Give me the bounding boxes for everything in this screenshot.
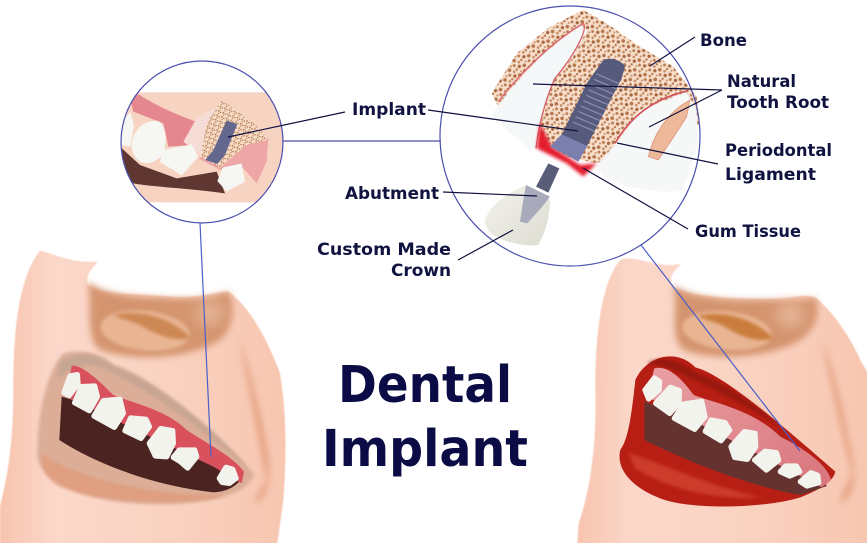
right face: mouth with restored tooth xyxy=(577,258,867,543)
implant threads xyxy=(573,74,618,131)
teeth xyxy=(64,375,236,483)
gum around implant xyxy=(198,138,268,183)
lips xyxy=(37,351,254,504)
inner bone in right tooth xyxy=(648,100,690,160)
nose base shading xyxy=(87,280,233,357)
connector: small circle to left mouth xyxy=(200,223,211,457)
label: periodontal ligament xyxy=(725,141,832,185)
label: periodontal ligament: Periodontal xyxy=(725,141,832,161)
implant xyxy=(205,121,237,164)
label: natural tooth root xyxy=(727,72,829,113)
crown xyxy=(485,185,550,245)
label: gum tissue: Gum Tissue xyxy=(695,222,801,242)
tooth far left xyxy=(122,112,134,146)
leader lines xyxy=(228,37,722,260)
tooth 1 xyxy=(132,121,166,163)
connector: large circle to right mouth xyxy=(641,245,800,451)
abutment xyxy=(520,185,550,223)
translucent root xyxy=(184,106,218,155)
skin xyxy=(577,258,867,543)
large circle: implant detail xyxy=(440,6,700,266)
left face: mouth with missing tooth xyxy=(0,251,286,543)
tooth 2 xyxy=(160,144,198,176)
lips xyxy=(620,356,835,507)
circle contents xyxy=(485,10,700,245)
small circle: implant in jaw xyxy=(120,61,285,223)
implant collar xyxy=(550,134,587,162)
mouth interior xyxy=(644,402,827,495)
implant shaft xyxy=(562,59,625,147)
nostril xyxy=(98,306,192,355)
tooth 3 xyxy=(217,163,245,192)
bone xyxy=(492,10,700,163)
philtrum shading xyxy=(238,337,269,503)
upper gum xyxy=(647,368,831,487)
nose tip highlight xyxy=(197,302,223,325)
title xyxy=(322,356,528,479)
nose tip highlight xyxy=(776,304,804,326)
large circle outline xyxy=(440,6,700,266)
label: abutment: Abutment xyxy=(345,184,439,204)
implant body xyxy=(550,59,625,162)
lower lip highlight xyxy=(629,453,760,498)
cheek shading xyxy=(822,340,854,503)
right root edge xyxy=(615,91,688,143)
gum tissue xyxy=(537,123,597,177)
nostril xyxy=(680,307,774,355)
upper lip tone xyxy=(58,354,250,470)
small circle outline xyxy=(121,61,283,223)
upper lip dark xyxy=(647,359,780,427)
title: Implant xyxy=(322,420,528,479)
label: custom made crown: Custom Made xyxy=(317,240,451,260)
circle contents xyxy=(120,92,285,202)
upper gum xyxy=(132,94,195,147)
mouth interior xyxy=(59,397,243,492)
connector: circle to circle xyxy=(283,140,441,142)
title: Dental xyxy=(338,356,512,415)
label: natural tooth root: Tooth Root xyxy=(727,93,829,113)
nostril dark xyxy=(115,313,191,339)
label: bone: Bone xyxy=(700,31,747,51)
right tooth root xyxy=(597,92,698,193)
label: periodontal ligament: Ligament xyxy=(725,165,816,185)
label: custom made crown: Crown xyxy=(391,261,451,281)
mouth interior xyxy=(120,147,225,193)
abutment screw xyxy=(536,163,559,193)
left root edge xyxy=(498,23,584,148)
left tooth root xyxy=(492,24,587,148)
lower lip tone xyxy=(41,453,227,502)
skin xyxy=(0,251,286,543)
label: custom made crown xyxy=(317,240,451,281)
label: natural tooth root: Natural xyxy=(727,72,796,92)
nostril dark xyxy=(699,314,773,340)
label: implant: Implant xyxy=(352,100,426,120)
nose base shading xyxy=(672,283,817,357)
teeth xyxy=(645,378,819,486)
upper gum xyxy=(67,366,244,483)
skin background xyxy=(120,92,285,202)
bone xyxy=(201,100,267,168)
